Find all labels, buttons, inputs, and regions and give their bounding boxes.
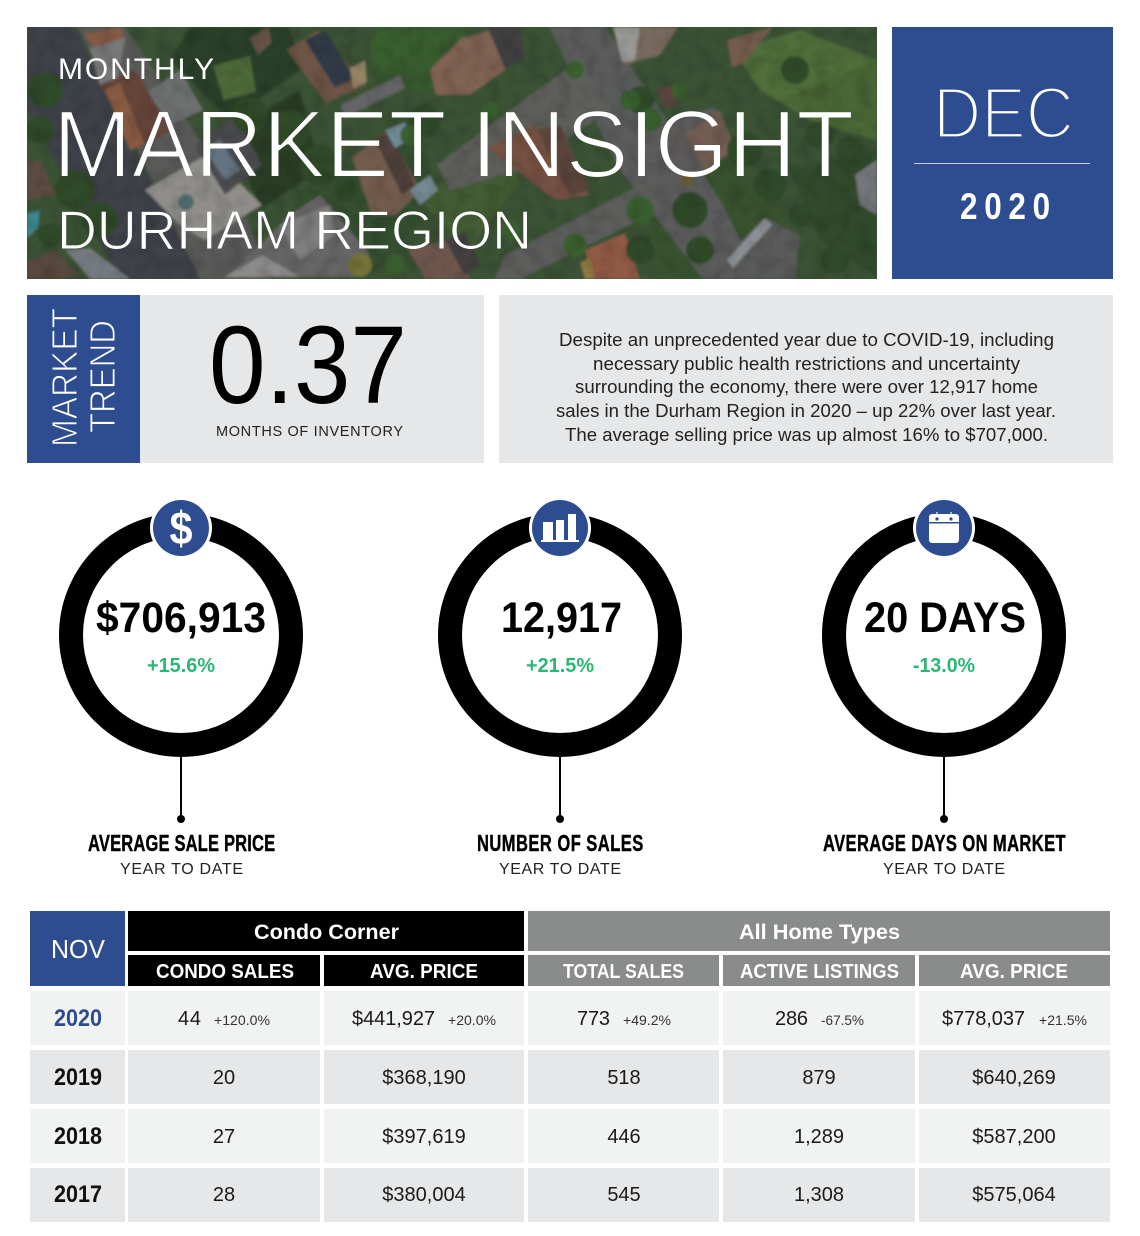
change: +15.6%: [147, 655, 215, 677]
column headers: [128, 955, 1110, 986]
paragraph text: Despite an unprecedented year due to COVID-19, including: [559, 329, 1054, 350]
paragraph text: surrounding the economy, there were over 12,917 home: [575, 376, 1038, 397]
main title: market insight: MARKET INSIGHT: [53, 91, 854, 198]
row 2018: 446: [607, 1126, 641, 1148]
pointer: [940, 757, 948, 823]
row 2018: 27: [213, 1126, 235, 1148]
row 2020: $441,927: [352, 1008, 435, 1030]
ring: [71, 525, 291, 745]
sublabel: YEAR TO DATE: [120, 861, 243, 878]
pointer: [177, 757, 185, 823]
row 2020: 773: [577, 1008, 610, 1030]
sublabel: YEAR TO DATE: [883, 861, 1005, 878]
month header: NOV: [51, 934, 106, 964]
row 2017: 28: [213, 1184, 235, 1206]
row 2020: 286: [775, 1008, 808, 1030]
row 2020: 44: [178, 1008, 201, 1030]
stat: average sale price: [71, 497, 291, 878]
row 2018: [30, 1109, 1110, 1163]
panel: market trend: [27, 295, 484, 463]
row 2019: 518: [607, 1067, 641, 1089]
ring: [450, 525, 670, 745]
row 2019: [30, 1050, 1110, 1104]
icon: dollar sign: [150, 497, 212, 559]
month header: [30, 911, 125, 986]
row 2020: -67.5%: [821, 1012, 864, 1028]
label: AVERAGE DAYS ON MARKET: [823, 831, 1066, 857]
row 2019: 2019: [54, 1064, 102, 1091]
region name: DURHAM REGION: [57, 199, 532, 261]
row 2017: $380,004: [382, 1184, 466, 1206]
vertical label: trend: TREND: [82, 320, 123, 433]
icon: bar chart: [529, 497, 591, 559]
value: 20 DAYS: [864, 594, 1026, 642]
icon: calendar: [913, 497, 975, 559]
change: +21.5%: [526, 655, 594, 677]
row 2017: $575,064: [972, 1184, 1056, 1206]
value: 12,917: [501, 594, 622, 642]
paragraph text: sales in the Durham Region in 2020 – up 22% over last year.: [556, 400, 1056, 421]
row 2020: 2020: [54, 1005, 102, 1032]
group header: all home types: All Home Types: [739, 921, 900, 944]
column headers: ACTIVE LISTINGS: [740, 961, 899, 983]
row 2018: $587,200: [972, 1126, 1056, 1148]
row 2017: 2017: [54, 1181, 102, 1208]
change: -13.0%: [913, 655, 975, 677]
subtitle: monthly: MONTHLY: [58, 53, 214, 86]
icon: dollar sign: $: [169, 503, 193, 555]
paragraph text: necessary public health restrictions and uncertainty: [593, 353, 1021, 374]
vertical label: market: MARKET: [44, 308, 85, 447]
row 2018: 1,289: [794, 1126, 844, 1148]
header photo panel: aerial view of houses: [26, 27, 877, 279]
months of inventory label: MONTHS OF INVENTORY: [216, 424, 403, 440]
ring: [834, 525, 1054, 745]
value: $706,913: [96, 594, 266, 642]
panel: market summary paragraph: [499, 295, 1113, 463]
title text: monthly market insight durham region: [53, 53, 854, 261]
sublabel: YEAR TO DATE: [499, 861, 621, 878]
row 2020: +20.0%: [448, 1012, 496, 1028]
label: AVERAGE SALE PRICE: [88, 831, 275, 857]
column headers: AVG. PRICE: [370, 961, 478, 983]
stat: average days on market: [823, 497, 1066, 878]
months of inventory number: 0.37: [209, 304, 407, 427]
row 2020: +120.0%: [214, 1012, 270, 1028]
row 2019: 20: [213, 1067, 235, 1089]
row 2020: +49.2%: [623, 1012, 671, 1028]
column headers: TOTAL SALES: [563, 961, 684, 983]
group header: condo corner: Condo Corner: [254, 921, 399, 944]
year: 2020: [960, 187, 1050, 228]
row 2019: 879: [802, 1067, 836, 1089]
group header: condo corner: [128, 911, 524, 951]
table: november statistics: [30, 911, 1110, 1222]
column headers: AVG. PRICE: [960, 961, 1068, 983]
label: NUMBER OF SALES: [477, 831, 643, 857]
row 2017: 1,308: [794, 1184, 844, 1206]
column headers: CONDO SALES: [156, 961, 294, 983]
row 2018: $397,619: [382, 1126, 466, 1148]
paragraph text: The average selling price was up almost 16% to $707,000.: [565, 424, 1048, 445]
row 2018: 2018: [54, 1123, 102, 1150]
row 2020: $778,037: [942, 1008, 1025, 1030]
row 2019: $640,269: [972, 1067, 1056, 1089]
stat: number of sales: [450, 497, 670, 878]
row 2020: [30, 991, 1110, 1045]
date panel: dec 2020: [892, 27, 1113, 279]
pointer: [556, 757, 564, 823]
row 2017: [30, 1168, 1110, 1222]
group header: all home types: [528, 911, 1110, 951]
paragraph text: [556, 329, 1056, 445]
month: DEC: [933, 74, 1074, 154]
row 2020: +21.5%: [1039, 1012, 1087, 1028]
row 2017: 545: [607, 1184, 641, 1206]
row 2019: $368,190: [382, 1067, 466, 1089]
